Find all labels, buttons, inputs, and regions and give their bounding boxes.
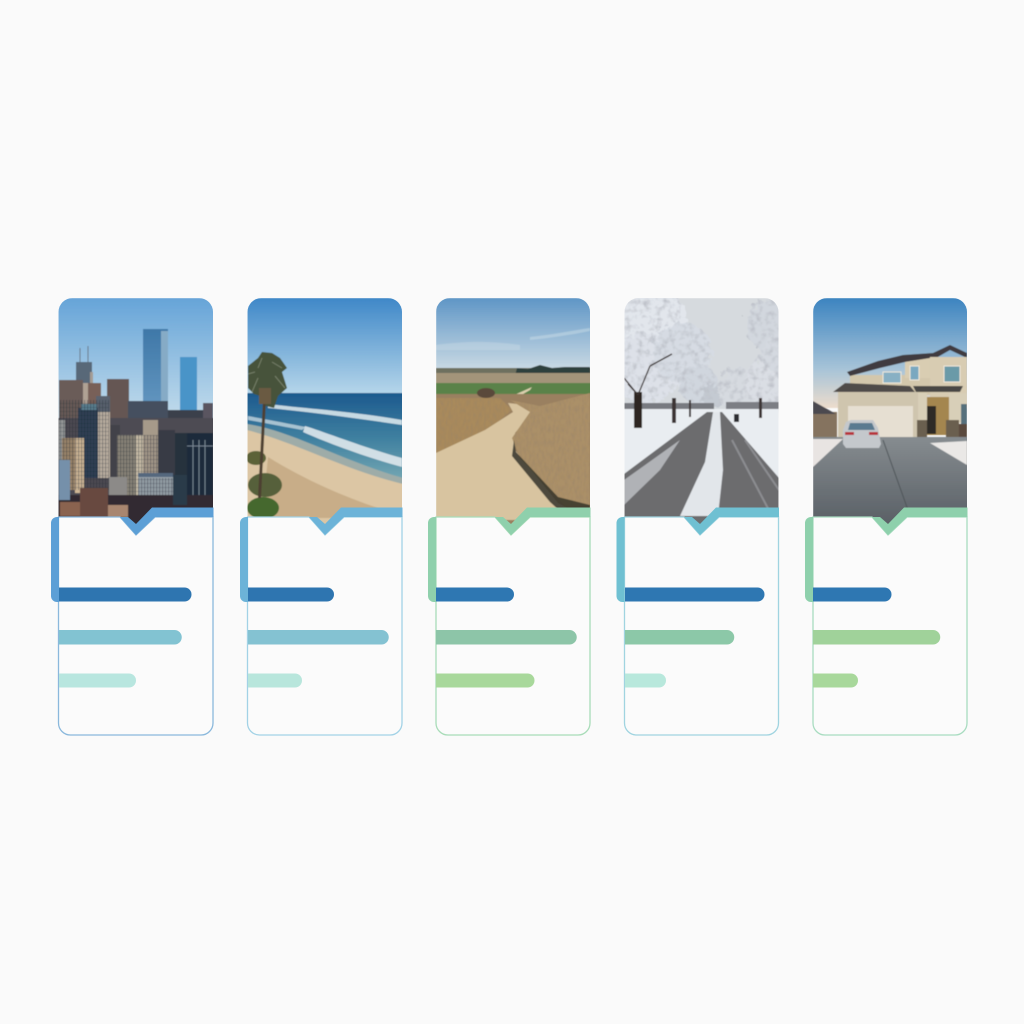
card 5: house (805, 298, 968, 735)
bar 2 (625, 630, 734, 644)
bar 2 (813, 630, 940, 644)
panel: card 2 body (248, 517, 402, 735)
bar 3 (436, 674, 534, 688)
side tab (428, 517, 436, 602)
bar 1 (59, 588, 192, 602)
bar 3 (813, 674, 858, 688)
bar 2 (436, 630, 577, 644)
notch accent (684, 508, 779, 535)
photo: winter road (624, 298, 778, 524)
bar 1 (248, 588, 334, 602)
bar 3 (59, 674, 136, 688)
bar 1 (436, 588, 514, 602)
notch accent (309, 508, 402, 535)
bar 3 (625, 674, 666, 688)
bar 1 (625, 588, 764, 602)
panel: card 5 body (813, 517, 967, 735)
notch accent (120, 508, 214, 535)
photo: city skyline (58, 298, 214, 530)
card 4: snowy street (616, 298, 780, 736)
notch accent (872, 508, 968, 535)
card 2: beach (240, 298, 403, 735)
side tab (51, 517, 59, 602)
panel: card 3 body (436, 517, 590, 735)
side tab (616, 517, 624, 602)
bar 1 (813, 588, 892, 602)
side tab (805, 517, 813, 602)
card 3: country road (428, 298, 591, 735)
bar 3 (248, 674, 302, 688)
bar 2 (59, 630, 182, 644)
card 1: city (51, 298, 214, 735)
infographic: five photo cards with bar panels (51, 298, 968, 736)
photo: palm beach (246, 298, 403, 530)
panel: card 1 body (58, 517, 213, 735)
side tab (240, 517, 248, 602)
photo: dirt road (436, 298, 591, 531)
notch accent (495, 508, 590, 535)
photo: suburban house (813, 298, 968, 532)
bar 2 (248, 630, 389, 644)
panel: card 4 body (624, 517, 778, 735)
